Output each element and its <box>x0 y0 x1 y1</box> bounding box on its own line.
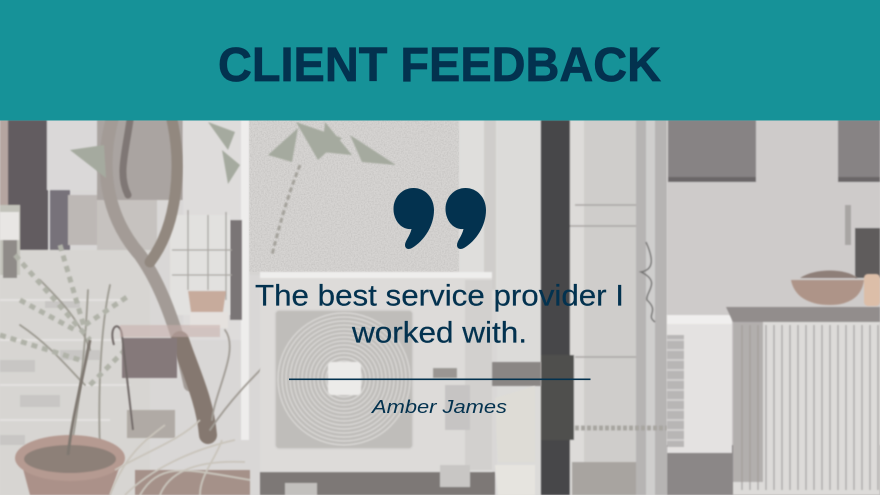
corrugated box with bowl <box>726 270 880 495</box>
header banner <box>0 0 880 120</box>
quote text: worked with. <box>351 316 527 350</box>
icon: quotation marks <box>394 188 486 249</box>
wall speckle texture <box>249 120 459 272</box>
author name: Amber James <box>371 397 507 417</box>
trellis and small planter <box>170 210 232 328</box>
quote text: The best service provider I <box>255 280 624 312</box>
white column and rough wall <box>183 120 541 495</box>
title: CLIENT FEEDBACK <box>218 39 661 92</box>
background photo: alley with air conditioner <box>0 120 880 495</box>
chair <box>112 325 220 438</box>
tree trunk and branches <box>0 120 280 455</box>
air conditioner unit <box>260 272 541 495</box>
small outdoor unit <box>667 315 732 453</box>
brown planter under bush <box>110 420 250 495</box>
pipes <box>541 120 668 495</box>
large plant pot <box>15 340 125 495</box>
alley buildings <box>0 120 183 495</box>
divider line <box>289 378 590 380</box>
right wall and windows <box>667 120 880 495</box>
leaves <box>70 122 396 255</box>
buckets <box>495 386 535 495</box>
